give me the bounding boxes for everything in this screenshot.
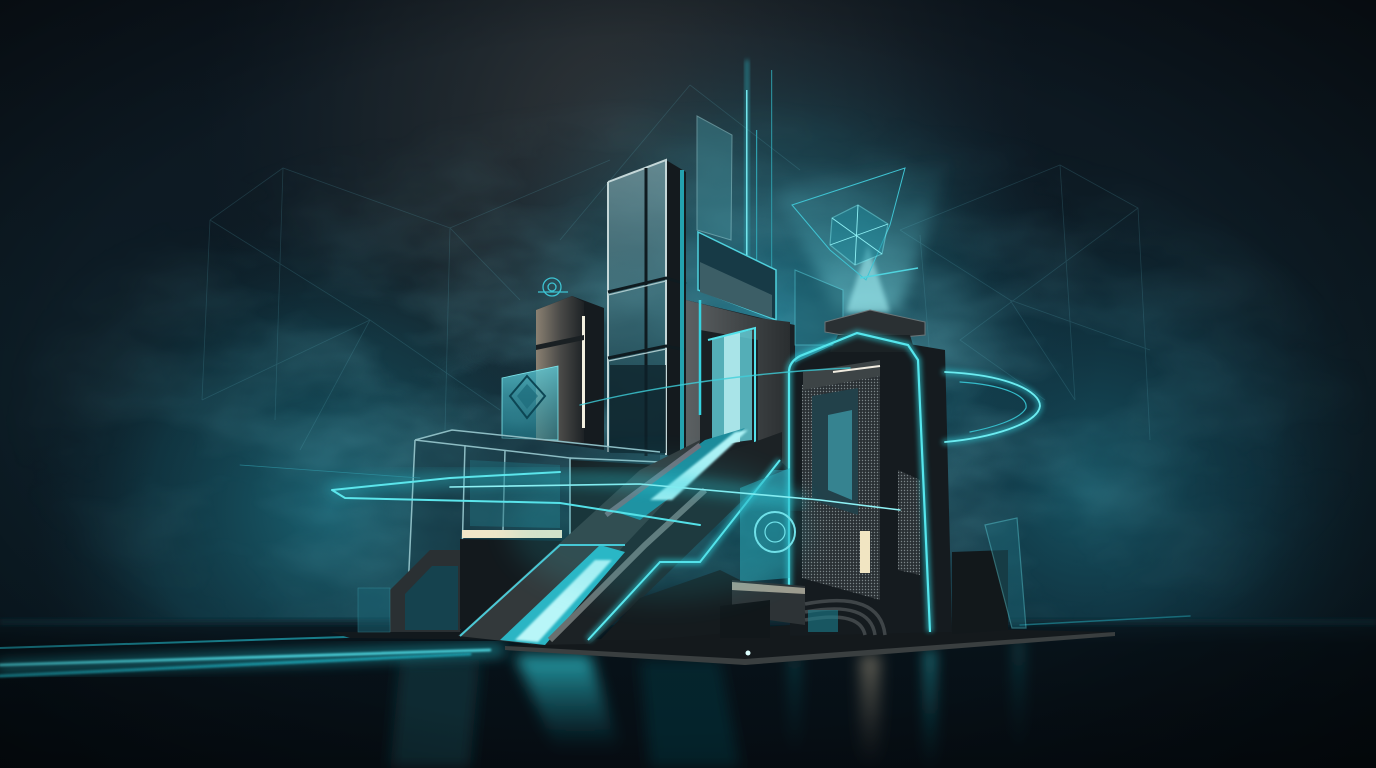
left mid tower (502, 296, 604, 450)
light ring around right tower (580, 368, 1040, 442)
left glass pavilion (358, 430, 660, 632)
central tower body with elevator (686, 232, 843, 470)
diagonal stairs and escalators (458, 428, 782, 645)
wireframe lines in the background (202, 85, 1150, 450)
lower block with circular hologram (600, 468, 795, 640)
right server tower (789, 310, 952, 636)
main tall glass tower (608, 160, 686, 460)
tall slim glass fin and light lines (697, 60, 772, 280)
hologram: beam and cube (775, 160, 950, 312)
base platform (330, 625, 1115, 665)
small floating icon (538, 278, 568, 296)
horizontal light streams (240, 465, 900, 525)
ambient glow over the building (510, 460, 810, 600)
machinery base (720, 518, 1026, 638)
floor reflections (390, 640, 1022, 768)
floor (0, 619, 1376, 768)
light trails on the floor (0, 616, 1190, 676)
